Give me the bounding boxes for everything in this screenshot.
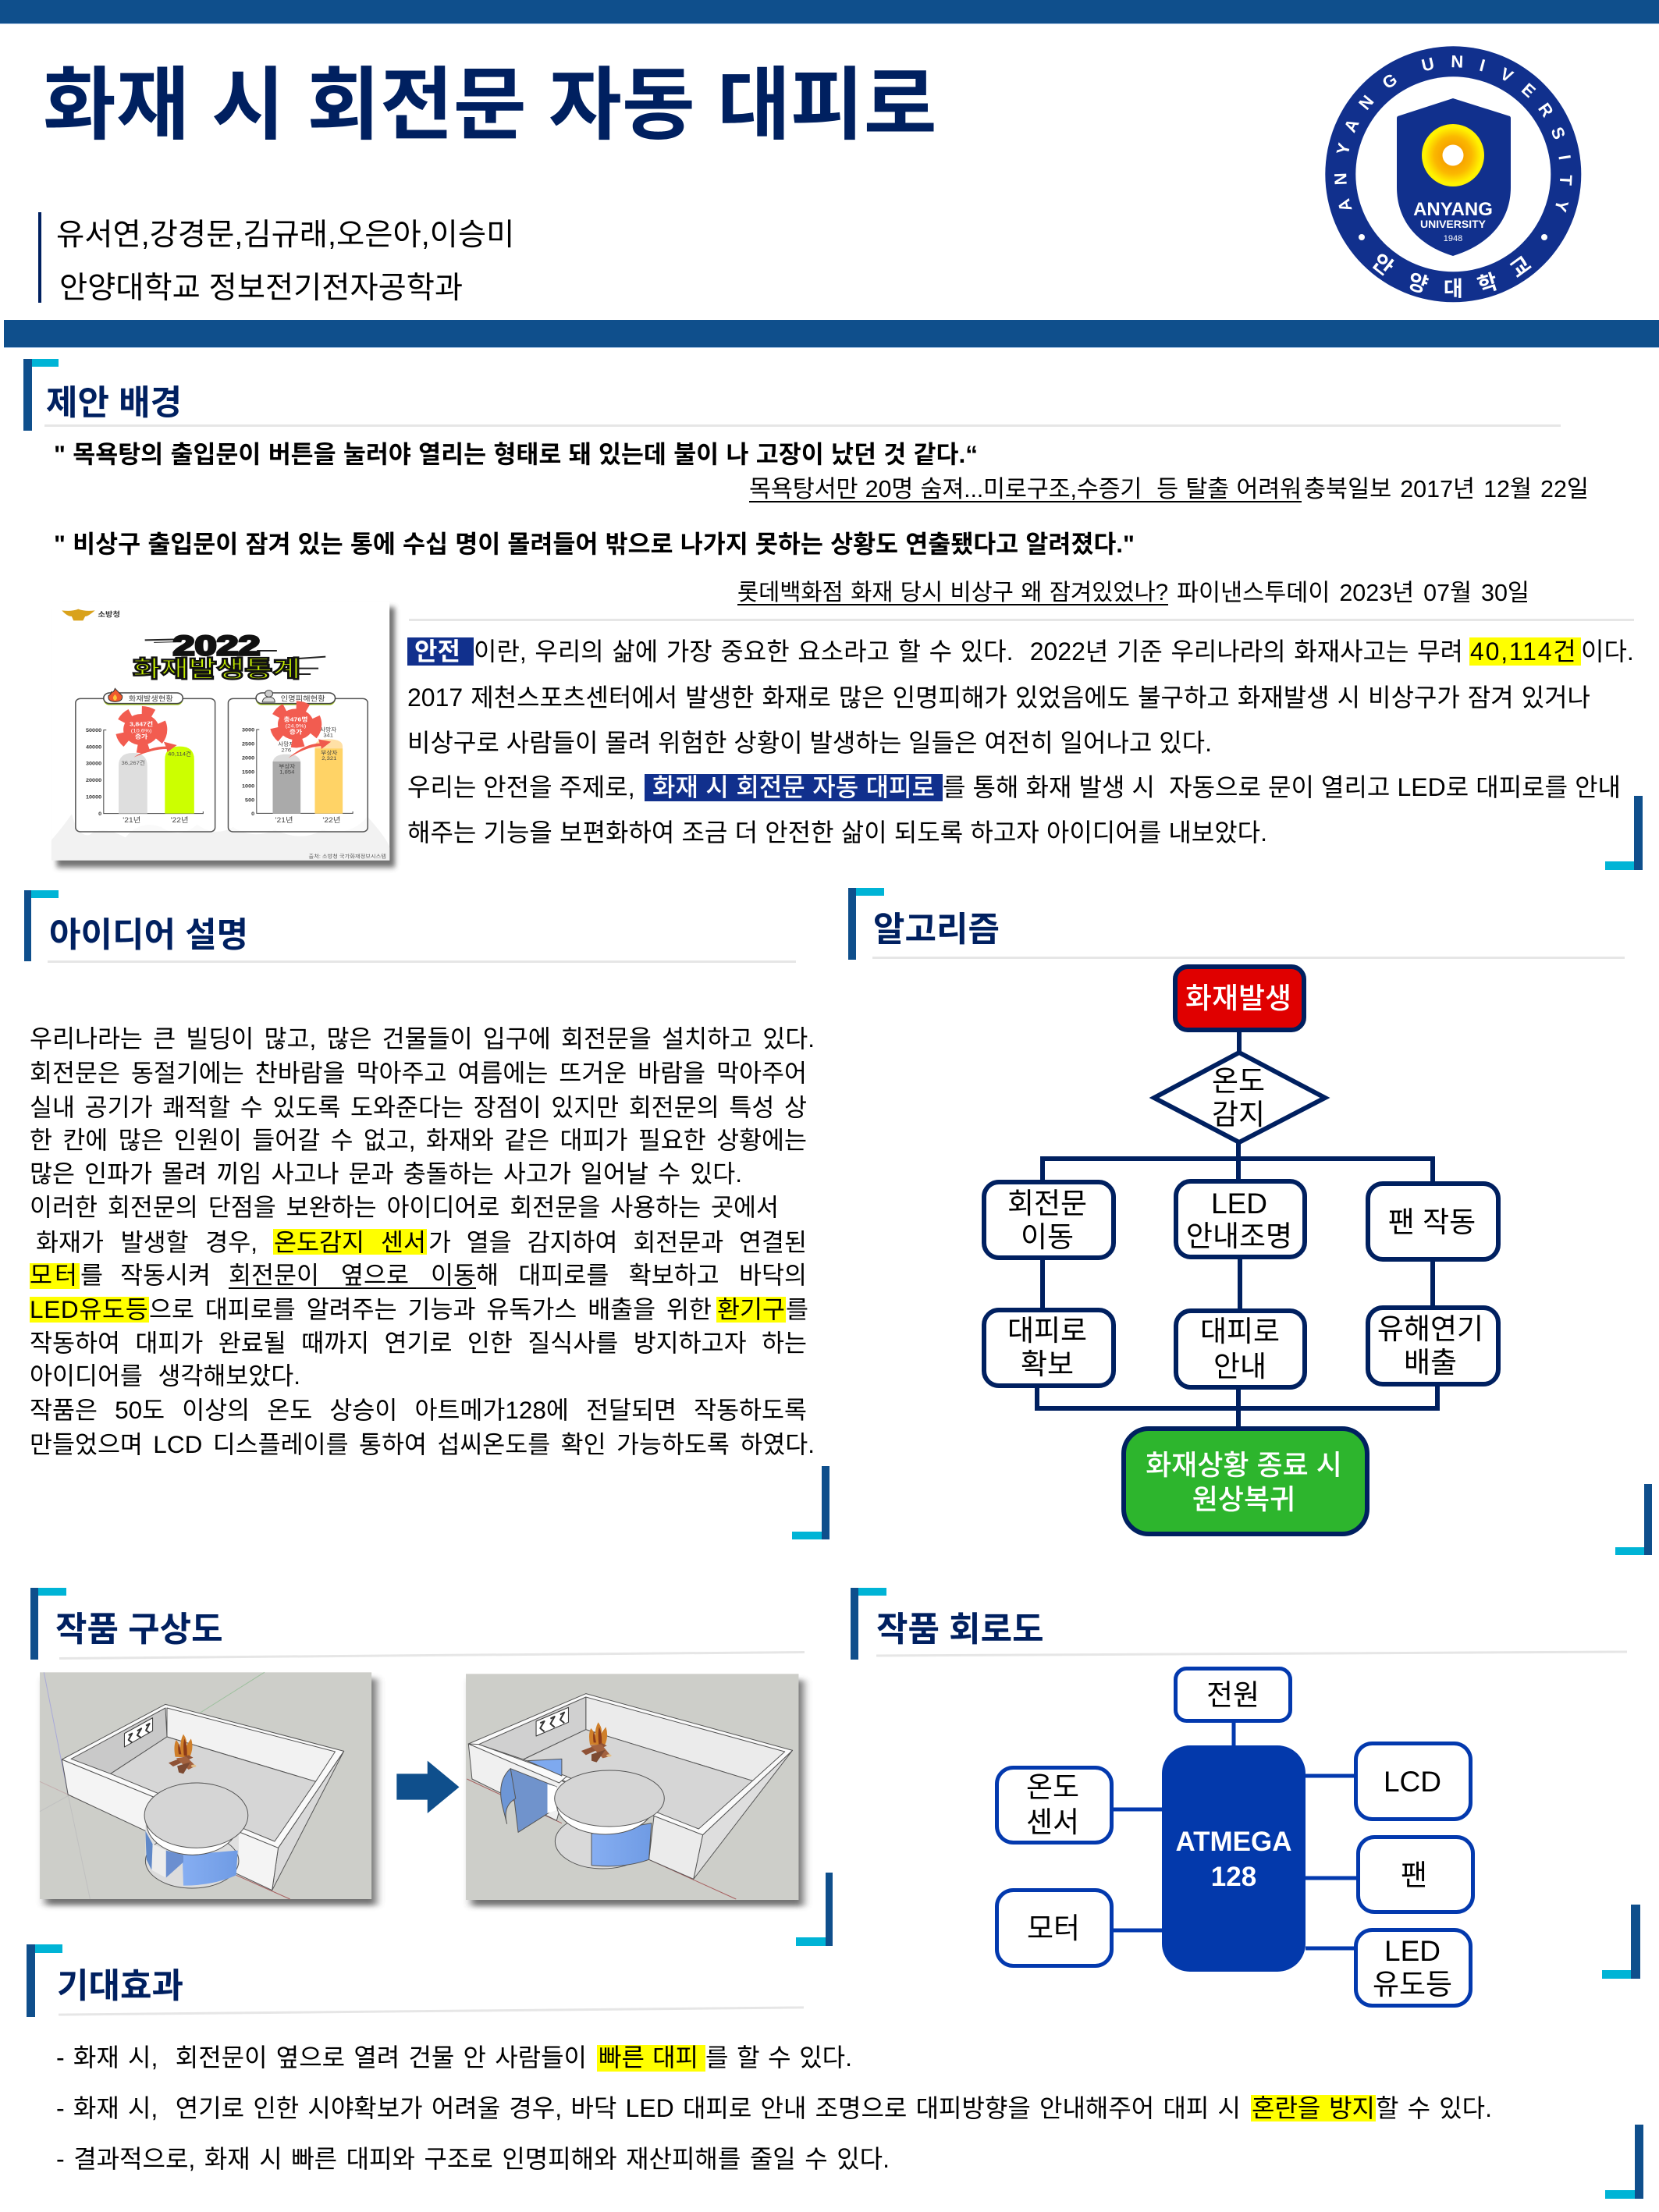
icon: Anyang University logo: 안 bbox=[1368, 250, 1398, 280]
department: 안양대학교 정보전기전자공학과 bbox=[59, 271, 463, 305]
decision: 온도 감지: 온도 bbox=[1212, 1065, 1265, 1097]
text block: background paragraph bbox=[407, 637, 1634, 847]
heading: 기대효과: 기대효과 bbox=[57, 1967, 183, 2005]
chip: ATMEGA 128: 128 bbox=[1211, 1862, 1256, 1892]
box: LED 안내조명 bbox=[1186, 1188, 1292, 1252]
highlight: LED유도등 bbox=[30, 1297, 149, 1323]
text block: background paragraph: 안전 bbox=[414, 637, 460, 666]
box: 모터: 모터 bbox=[1027, 1912, 1080, 1944]
highlight: 안전 bbox=[407, 637, 474, 666]
chart panel: 화재발생현황: 40,114건 bbox=[168, 751, 191, 757]
chart panel: 인명피해현황: 사망자 bbox=[320, 726, 337, 733]
chart panel: 인명피해현황: 1500 bbox=[242, 770, 254, 776]
chart panel: 인명피해현황: 341 bbox=[323, 733, 333, 739]
chart panel: 화재발생현황: 화재발생현황 bbox=[129, 694, 173, 703]
panel: 알고리즘 bbox=[848, 888, 1652, 1555]
chart panel: 화재발생현황: 40000 bbox=[86, 745, 101, 750]
heading: 아이디어 설명: 아이디어 설명 bbox=[49, 916, 248, 954]
box: LED 유도등 bbox=[1373, 1935, 1452, 2001]
box: 대피로 확보: 확보 bbox=[1021, 1348, 1074, 1380]
icon: Anyang University logo: 학 bbox=[1475, 270, 1501, 298]
text block: idea description bbox=[30, 1024, 815, 1458]
text block: idea description: 회전문이 옆으로 이동 bbox=[229, 1261, 476, 1289]
box: 유해연기 배출: 배출 bbox=[1404, 1347, 1457, 1379]
image: opened revolving door model bbox=[466, 1674, 804, 1906]
icon: fire bbox=[581, 1722, 612, 1763]
text block: idea description: 작품은 50도 이상의 온도 상승이 아트메가128에 전달되면 작동하도록 bbox=[30, 1396, 807, 1424]
chart panel: 인명피해현황: 3000 bbox=[242, 728, 254, 733]
chart panel: 화재발생현황: 3,847건 bbox=[130, 720, 153, 728]
icon: Anyang University logo bbox=[1325, 46, 1581, 303]
text block: idea description: 으로 대피로를 알려주는 기능과 유독가스 배출을 위한 bbox=[149, 1295, 712, 1323]
citation 2 source: 파이낸스투데이 2023년 07월 30일 bbox=[1177, 580, 1529, 606]
chart panel: 화재발생현황: '22년 bbox=[171, 816, 189, 825]
chart panel: 화재발생현황: 50000 bbox=[86, 728, 101, 733]
icon: Anyang University logo: E bbox=[1518, 80, 1540, 101]
author names: 유서연,강경문,김규래,오은아,이승미 bbox=[56, 218, 514, 252]
arrow bbox=[396, 1761, 459, 1813]
highlight: 40,114건 bbox=[1469, 637, 1581, 666]
box: 대피로 안내: 대피로 bbox=[1200, 1315, 1280, 1347]
chart panel: 인명피해현황: 0 bbox=[251, 811, 254, 817]
bullet 3: - 결과적으로, 화재 시 빠른 대피와 구조로 인명피해와 재산피해를 줄일 수 있다. bbox=[56, 2145, 890, 2173]
chip: ATMEGA 128: ATMEGA bbox=[1175, 1827, 1292, 1857]
icon: Anyang University logo: A bbox=[1340, 115, 1363, 135]
icon: Anyang University logo: S bbox=[1547, 124, 1569, 142]
chart panel: 인명피해현황: 사망자 bbox=[278, 740, 295, 747]
chart panel: 화재발생현황: 증가 bbox=[135, 733, 148, 740]
icon: Anyang University logo: Y bbox=[1333, 141, 1354, 157]
icon: Anyang University logo: V bbox=[1497, 64, 1516, 87]
chart panel: 인명피해현황: 2000 bbox=[242, 756, 254, 762]
box: LED 안내조명: LED bbox=[1211, 1188, 1267, 1220]
box: 화재상황 종료 시 원상복귀 bbox=[1146, 1449, 1342, 1515]
box: 온도 센서 bbox=[1026, 1771, 1079, 1838]
bullet 1: 빠른 대피 bbox=[599, 2043, 698, 2072]
bullet 1: - 화재 시, 회전문이 옆으로 열려 건물 안 사람들이 bbox=[56, 2043, 587, 2072]
icon: Anyang University logo: ANYANG bbox=[1413, 199, 1493, 220]
icon: Anyang University logo: U bbox=[1419, 54, 1436, 75]
text block: background paragraph: 를 통해 화재 발생 시 자동으로 문이 열리고 LED로 대피로를 안내 bbox=[943, 773, 1621, 801]
bullet 2: 혼란을 방지 bbox=[1252, 2094, 1375, 2122]
box: 화재발생: 화재발생 bbox=[1185, 982, 1291, 1014]
text block: idea description: 를 bbox=[786, 1295, 808, 1323]
box: 온도 센서: 센서 bbox=[1026, 1806, 1079, 1838]
box: LED 유도등: LED bbox=[1384, 1935, 1441, 1967]
icon: Anyang University logo: I bbox=[1554, 154, 1575, 162]
text block: background paragraph: 우리는 안전을 주제로, bbox=[407, 773, 635, 801]
heading: 작품 회로도: 작품 회로도 bbox=[876, 1610, 1044, 1649]
second header band bbox=[4, 320, 1659, 348]
icon: Anyang University logo: 교 bbox=[1506, 252, 1536, 282]
text block: idea description: 많은 인파가 몰려 끼임 사고나 문과 충돌하는 사고가 일어날 수 있다. bbox=[30, 1159, 742, 1188]
panel: 기대효과 bbox=[27, 1944, 1643, 2199]
box: 팬: 팬 bbox=[1401, 1859, 1427, 1891]
icon: Anyang University logo: N bbox=[1355, 91, 1377, 113]
heading: 제안 배경: 제안 배경 bbox=[46, 384, 182, 422]
citation 1 source: 충북일보 2017년 12월 22일 bbox=[1304, 476, 1589, 502]
icon: Anyang University logo: 양 bbox=[1405, 269, 1430, 297]
3D model renders and arrow bbox=[39, 1672, 810, 1910]
text block: idea description: 환기구 bbox=[717, 1295, 785, 1323]
bullet 1: 를 할 수 있다. bbox=[705, 2043, 852, 2072]
box: 회전문 이동 bbox=[1007, 1188, 1087, 1253]
text block: background paragraph: 화재 시 회전문 자동 대피로 bbox=[652, 773, 935, 801]
chart panel: 화재발생현황: 0 bbox=[98, 811, 101, 817]
text block: idea description: 온도감지 센서 bbox=[274, 1228, 426, 1256]
chart: 2022 화재발생 통계 image: 화재발생통계 bbox=[133, 656, 300, 682]
text block: background paragraph: 해주는 기능을 보편화하여 조금 더 안전한 삶이 되도록 하고자 아이디어를 내보았다. bbox=[407, 818, 1267, 847]
heading: 알고리즘: 알고리즘 bbox=[873, 911, 1000, 949]
box: 팬 작동: 팬 작동 bbox=[1388, 1206, 1476, 1238]
chart panel: 인명피해현황: 증가 bbox=[290, 728, 303, 735]
highlight: 온도감지 센서 bbox=[273, 1229, 427, 1255]
text block: idea description: 우리나라는 큰 빌딩이 많고, 많은 건물들이 입구에 회전문을 설치하고 있다. bbox=[30, 1024, 815, 1053]
text block: idea description: 화재가 발생할 경우, bbox=[36, 1228, 258, 1256]
panel: 작품 회로도 bbox=[851, 1588, 1640, 2008]
chart panel: 인명피해현황: 276 bbox=[281, 747, 291, 753]
icon: Anyang University logo: 대 bbox=[1444, 278, 1463, 301]
chart panel: 인명피해현황: 500 bbox=[245, 798, 254, 803]
text block: idea description: 실내 공기가 쾌적할 수 있도록 도와준다는 장점이 있지만 회전문의 특성 상 bbox=[30, 1093, 807, 1121]
text block: background paragraph: 40,114건 bbox=[1470, 637, 1578, 666]
text block: background paragraph: 2017 제천스포츠센터에서 발생한 화재로 많은 인명피해가 있었음에도 불구하고 화재발생 시 비상구가 잠겨 있거나 bbox=[407, 683, 1590, 712]
text block: idea description: 가 열을 감지하여 회전문과 연결된 bbox=[428, 1228, 807, 1256]
box: 대피로 확보: 대피로 bbox=[1007, 1315, 1087, 1347]
chart: 2022 화재발생 통계 image: 2022 bbox=[173, 630, 260, 661]
chart panel: 인명피해현황: 총476명 bbox=[284, 715, 307, 723]
quote 2: " 비상구 출입문이 잠겨 있는 통에 수십 명이 몰려들어 밖으로 나가지 못하는 상황도 연출됐다고 알려졌다." bbox=[54, 530, 1135, 558]
box: 온도 센서: 온도 bbox=[1026, 1771, 1079, 1803]
icon: Anyang University logo: I bbox=[1478, 55, 1487, 76]
chart panel: 인명피해현황: 1,854 bbox=[279, 769, 294, 776]
chart panel: 화재발생현황 bbox=[76, 688, 215, 832]
panel: 작품 구상도 bbox=[30, 1588, 833, 1946]
highlight: 모터 bbox=[30, 1263, 80, 1289]
box: LED 유도등: 유도등 bbox=[1373, 1969, 1452, 2001]
chart panel: 인명피해현황: 2500 bbox=[242, 742, 254, 747]
box: LED 안내조명: 안내조명 bbox=[1186, 1220, 1292, 1252]
chart panel: 화재발생현황: 20000 bbox=[86, 778, 101, 783]
chart panel: 인명피해현황 bbox=[228, 691, 368, 832]
chart panel: 화재발생현황: '21년 bbox=[123, 816, 140, 825]
icon: Anyang University logo: A bbox=[1334, 197, 1356, 214]
icon: Anyang University logo: G bbox=[1379, 69, 1401, 93]
text block: background paragraph: 비상구로 사람들이 몰려 위험한 상황이 발생하는 일들은 여전히 일어나고 있다. bbox=[407, 729, 1212, 757]
quote 1: " 목욕탕의 출입문이 버튼을 눌러야 열리는 형태로 돼 있는데 불이 나 고장이 났던 것 같다.“ bbox=[54, 440, 978, 468]
box: 유해연기 배출 bbox=[1377, 1313, 1483, 1379]
box: 전원: 전원 bbox=[1206, 1679, 1259, 1711]
authors block bbox=[38, 212, 514, 305]
chart panel: 인명피해현황: '22년 bbox=[322, 816, 340, 825]
top header band bbox=[0, 0, 1659, 24]
chart panel: 화재발생현황: (10.6%) bbox=[131, 728, 151, 734]
chart panel: 인명피해현황: '21년 bbox=[275, 816, 293, 825]
box: LCD: LCD bbox=[1384, 1766, 1441, 1798]
decision: 온도 감지: 감지 bbox=[1212, 1099, 1265, 1131]
chip: ATMEGA 128 bbox=[1162, 1745, 1306, 1972]
text block: idea description: 만들었으며 LCD 디스플레이를 통하여 섭씨온도를 확인 가능하도록 하였다. bbox=[30, 1430, 815, 1458]
icon: Anyang University logo: N bbox=[1451, 51, 1464, 72]
text block: idea description: 를 작동시켜 bbox=[80, 1261, 211, 1289]
box: 화재상황 종료 시 원상복귀: 화재상황 종료 시 bbox=[1146, 1449, 1342, 1481]
chart panel: 인명피해현황: (24.9%) bbox=[286, 723, 306, 729]
text block: idea description: 회전문은 동절기에는 찬바람을 막아주고 여름에는 뜨거운 바람을 막아주어 bbox=[30, 1059, 807, 1087]
icon: Anyang University logo: UNIVERSITY bbox=[1420, 218, 1487, 230]
heading: 작품 구상도: 작품 구상도 bbox=[55, 1610, 223, 1649]
highlight: 환기구 bbox=[716, 1297, 786, 1323]
chart panel: 인명피해현황: 부상자 bbox=[321, 749, 338, 756]
citation 1: 목욕탕서만 20명 숨져...미로구조,수증기 등 탈출 어려워 bbox=[749, 476, 1302, 502]
text block: background paragraph: 이란, 우리의 삶에 가장 중요한 요소라고 할 수 있다. 2022년 기준 우리나라의 화재사고는 무려 bbox=[474, 637, 1463, 666]
chart: 2022 화재발생 통계 image bbox=[52, 604, 399, 872]
bullet 2: 할 수 있다. bbox=[1376, 2094, 1492, 2122]
icon: fire agency emblem: 소방청 bbox=[98, 609, 120, 619]
chart panel: 화재발생현황: 30000 bbox=[86, 762, 101, 767]
box: 대피로 확보 bbox=[1007, 1315, 1087, 1380]
icon: fire agency emblem bbox=[62, 609, 120, 620]
chart panel: 인명피해현황: 1000 bbox=[242, 784, 254, 789]
citation 2: 롯데백화점 화재 당시 비상구 왜 잠겨있었나? bbox=[737, 580, 1168, 605]
circuit block diagram bbox=[995, 1667, 1475, 2008]
flowchart bbox=[982, 964, 1501, 1536]
box: 대피로 안내 bbox=[1200, 1315, 1280, 1383]
decision: 온도 감지 bbox=[1212, 1065, 1265, 1131]
chart panel: 인명피해현황: 2,321 bbox=[321, 755, 336, 762]
highlight: 화재 시 회전문 자동 대피로 bbox=[645, 774, 943, 801]
chart panel: 화재발생현황: 36,267건 bbox=[122, 759, 145, 766]
icon: Anyang University logo: N bbox=[1330, 172, 1351, 186]
panel: 제안 배경 bbox=[23, 359, 1643, 872]
text block: idea description: 한 칸에 많은 인원이 들어갈 수 없고, 화재와 같은 대피가 필요한 상황에는 bbox=[30, 1126, 807, 1154]
text block: idea description: LED유도등 bbox=[30, 1295, 148, 1323]
box: 회전문 이동: 회전문 bbox=[1007, 1188, 1087, 1220]
box: 유해연기 배출: 유해연기 bbox=[1377, 1313, 1483, 1345]
image: closed revolving door model bbox=[40, 1672, 377, 1905]
box: 화재상황 종료 시 원상복귀: 원상복귀 bbox=[1192, 1483, 1295, 1515]
chart panel: 인명피해현황: 인명피해현황 bbox=[281, 694, 325, 703]
text block: idea description: 아이디어를 생각해보았다. bbox=[30, 1362, 300, 1390]
box: 대피로 안내: 안내 bbox=[1213, 1351, 1266, 1383]
title: 화재 시 회전문 자동 대피로 bbox=[43, 61, 937, 150]
chart panel: 인명피해현황: 부상자 bbox=[279, 763, 296, 769]
bullet 1 bbox=[56, 2043, 852, 2072]
icon: Anyang University logo: T bbox=[1556, 174, 1576, 186]
icon: fire bbox=[169, 1734, 196, 1774]
text block: idea description: 모터 bbox=[30, 1261, 80, 1289]
chart: 2022 화재발생 통계 image: 출처: 소방청 국가화재정보시스템 bbox=[309, 853, 386, 860]
text block: idea description: 작동하여 대피가 완료될 때까지 연기로 인한 질식사를 방지하고자 하는 bbox=[30, 1329, 807, 1357]
icon: Anyang University logo: 1948 bbox=[1444, 234, 1462, 243]
text block: idea description: 해 대피로를 확보하고 바닥의 bbox=[476, 1261, 807, 1289]
text block: idea description: 이러한 회전문의 단점을 보완하는 아이디어로 회전문을 사용하는 곳에서 bbox=[30, 1193, 779, 1221]
icon: Anyang University logo: Y bbox=[1551, 197, 1572, 215]
chart panel: 화재발생현황: 10000 bbox=[86, 795, 101, 801]
icon: Anyang University logo: R bbox=[1534, 99, 1558, 121]
panel: 아이디어 설명 bbox=[24, 890, 830, 1539]
bullet 2: - 화재 시, 연기로 인한 시야확보가 어려울 경우, 바닥 LED 대피로 안내 조명으로 대피방향을 안내해주어 대피 시 bbox=[56, 2094, 1241, 2122]
text block: background paragraph: 이다. bbox=[1581, 637, 1634, 666]
box: 회전문 이동: 이동 bbox=[1021, 1221, 1074, 1253]
